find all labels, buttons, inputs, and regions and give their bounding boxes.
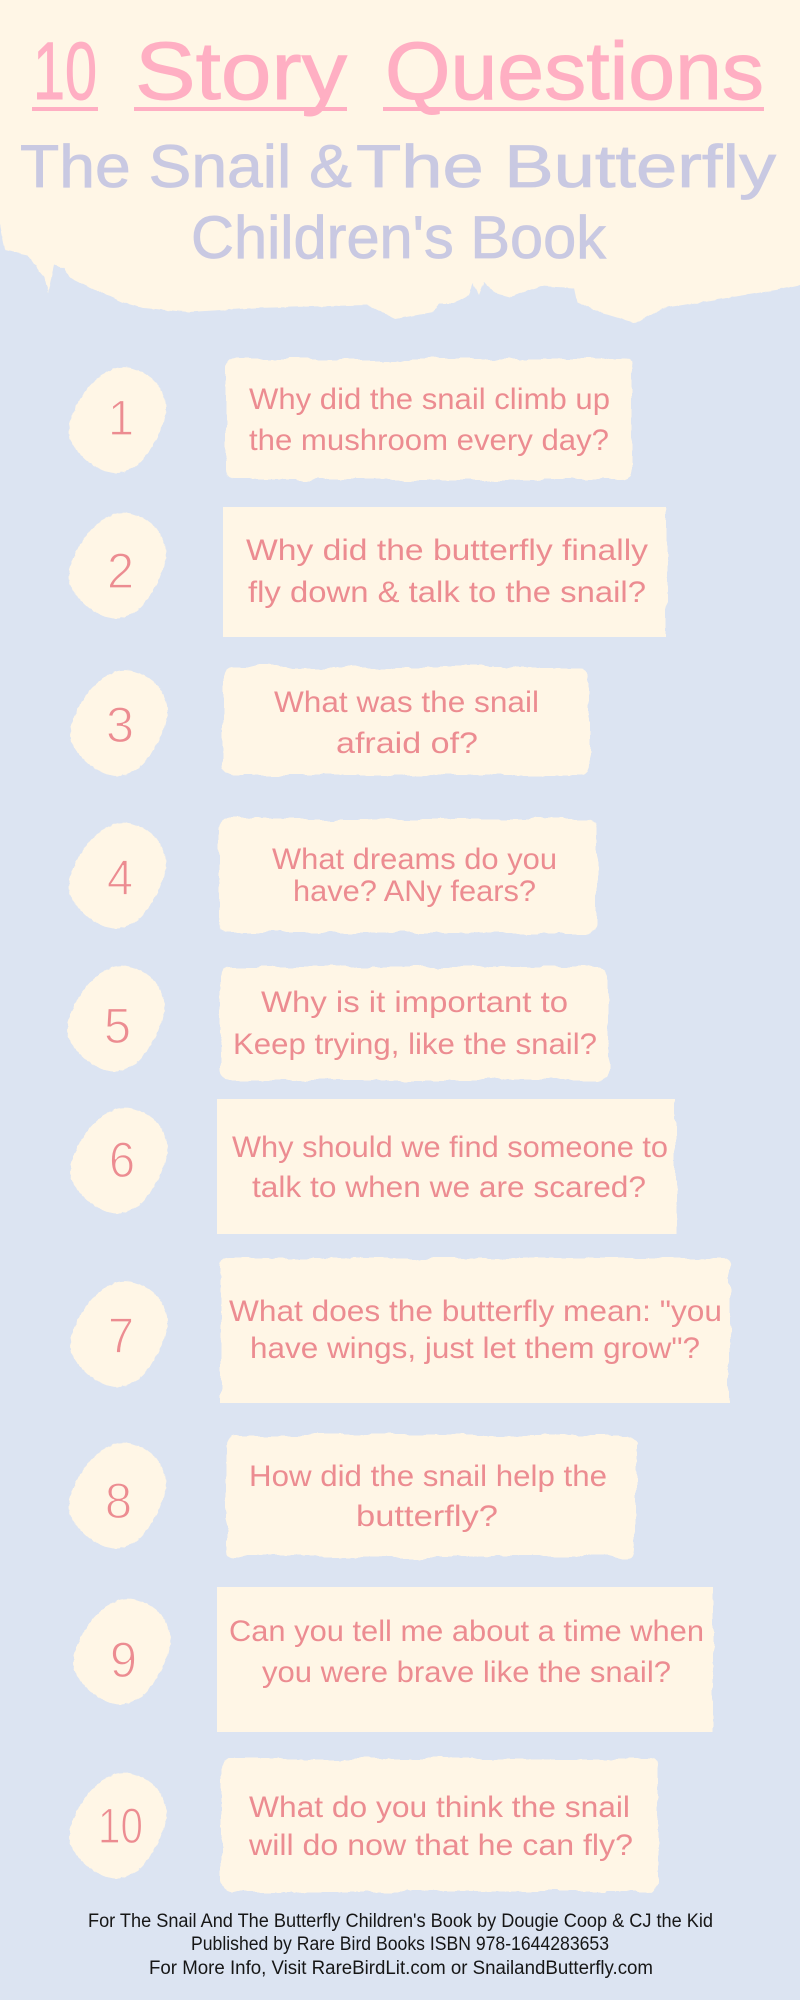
footer credits: For The Snail And The Butterfly Children's Book by Dougie Coop & CJ the Kid <box>88 1911 713 1932</box>
question text 10 <box>248 1791 633 1862</box>
question text 8: How did the snail help the <box>249 1460 607 1493</box>
question box 1 <box>226 359 632 480</box>
title: Story <box>135 26 347 117</box>
question text 10: What do you think the snail <box>249 1791 630 1824</box>
question text 6: talk to when we are scared? <box>252 1171 646 1204</box>
question text 2: Why did the butterfly finally <box>246 534 648 567</box>
question text 3 <box>274 686 539 760</box>
question text 5: Keep trying, like the snail? <box>233 1028 597 1061</box>
question box 2 <box>223 507 668 637</box>
question box 6 <box>217 1099 678 1234</box>
question text 5: Why is it important to <box>261 986 568 1019</box>
number 3: 3 <box>106 697 134 753</box>
question text 4 <box>272 843 557 908</box>
question row 8 <box>69 1435 635 1557</box>
title: 10 <box>33 26 97 117</box>
question text 2: fly down & talk to the snail? <box>248 576 646 609</box>
question text 8: butterfly? <box>356 1500 498 1533</box>
footer credits <box>88 1911 713 1979</box>
question text 1: Why did the snail climb up <box>249 383 610 416</box>
question text 1 <box>249 383 610 457</box>
question row 1 <box>69 359 632 480</box>
question box 9 <box>217 1587 715 1732</box>
question text 7: What does the butterfly mean: "you <box>229 1295 722 1328</box>
question text 7: have wings, just let them grow"? <box>250 1332 700 1365</box>
number 9: 9 <box>110 1632 137 1688</box>
footer credits: For More Info, Visit RareBirdLit.com or SnailandButterfly.com <box>149 1958 653 1979</box>
number 10: 10 <box>98 1798 143 1854</box>
number blob 6 <box>70 1108 168 1214</box>
question text 8 <box>249 1460 607 1533</box>
question box 4 <box>220 819 597 933</box>
number 4: 4 <box>107 850 133 906</box>
question text 10: will do now that he can fly? <box>248 1829 633 1862</box>
question row 2 <box>68 507 668 637</box>
subtitle: Children's Book <box>191 204 607 271</box>
number blob 5 <box>67 966 165 1072</box>
number blob 8 <box>69 1443 166 1549</box>
question box 7 <box>219 1257 732 1403</box>
question text 4: What dreams do you <box>272 843 557 876</box>
number 7: 7 <box>108 1308 134 1364</box>
question row 3 <box>70 667 589 776</box>
question text 9: Can you tell me about a time when <box>229 1615 704 1648</box>
question text 2 <box>246 534 648 609</box>
number blob 10 <box>69 1773 167 1879</box>
question box 5 <box>220 967 608 1080</box>
title <box>32 26 764 117</box>
question text 3: afraid of? <box>336 727 478 760</box>
number blob 7 <box>70 1281 168 1387</box>
number blob 1 <box>69 367 166 473</box>
question text 6: Why should we find someone to <box>232 1131 668 1164</box>
question row 9 <box>73 1587 715 1732</box>
question row 5 <box>67 966 608 1080</box>
number 5: 5 <box>104 998 131 1054</box>
question text 7 <box>229 1295 722 1365</box>
question row 6 <box>70 1099 678 1234</box>
question text 6 <box>232 1131 668 1204</box>
subtitle <box>20 133 776 271</box>
question row 4 <box>69 819 597 933</box>
number blob 4 <box>69 823 166 929</box>
question text 9: you were brave like the snail? <box>262 1656 671 1689</box>
header panel <box>0 0 800 323</box>
question box 8 <box>226 1435 635 1557</box>
question text 3: What was the snail <box>274 686 539 719</box>
number 1: 1 <box>108 390 134 446</box>
number 2: 2 <box>107 543 134 599</box>
title: Questions <box>385 26 764 117</box>
number blob 9 <box>73 1599 171 1705</box>
number 6: 6 <box>109 1132 135 1188</box>
number blob 2 <box>69 513 166 619</box>
question row 10 <box>69 1759 658 1891</box>
question box 10 <box>221 1759 658 1891</box>
question text 1: the mushroom every day? <box>249 424 609 457</box>
number blob 3 <box>70 670 168 776</box>
subtitle: The Butterfly <box>356 133 776 200</box>
footer credits: Published by Rare Bird Books ISBN 978-1644283653 <box>191 1934 609 1955</box>
question text 5 <box>233 986 597 1061</box>
question box 3 <box>223 667 589 775</box>
question row 7 <box>70 1257 732 1403</box>
number 8: 8 <box>105 1473 132 1529</box>
torn paper header background <box>0 0 800 323</box>
subtitle: The Snail & <box>20 133 352 200</box>
question text 9 <box>229 1615 704 1689</box>
question text 4: have? ANy fears? <box>293 875 536 908</box>
